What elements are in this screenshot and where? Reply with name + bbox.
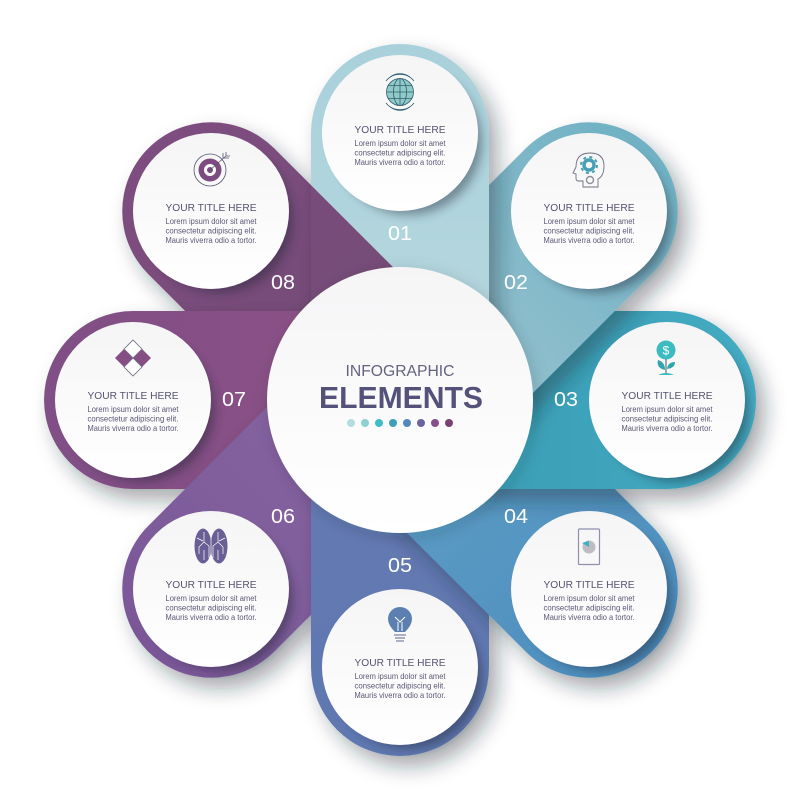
body text 01: Mauris viverra odio a tortor. (354, 158, 446, 167)
number 02: 02 (504, 272, 528, 294)
body text 04: Lorem ipsum dolor sit amet (544, 594, 635, 603)
card 06 (133, 511, 293, 671)
body text 06: Lorem ipsum dolor sit amet (166, 594, 257, 603)
icon: brain (194, 528, 228, 564)
icon: head with gears (573, 153, 604, 187)
body text 02: consectetur adipiscing elit. (544, 227, 634, 236)
icon: tablet with pie chart (578, 529, 600, 564)
petal 04 (337, 337, 715, 715)
icon: puzzle pieces (115, 340, 151, 376)
petal 01 (311, 44, 489, 400)
body text 01: Lorem ipsum dolor sit amet (354, 139, 446, 148)
title 03: YOUR TITLE HERE (622, 390, 712, 402)
card 07 (55, 322, 215, 482)
body text 08: Lorem ipsum dolor sit amet (166, 217, 257, 226)
body text 03: Mauris viverra odio a tortor. (622, 424, 712, 433)
body text 02: Mauris viverra odio a tortor. (544, 236, 634, 245)
icon: target with arrow (194, 152, 230, 186)
card 02 (511, 133, 671, 293)
icon: globe (386, 74, 414, 110)
body text 07: Mauris viverra odio a tortor. (88, 424, 178, 433)
petal 02 (337, 85, 715, 463)
icon: money plant: $ (663, 344, 670, 358)
number 06: 06 (271, 506, 295, 528)
title 01: YOUR TITLE HERE (354, 124, 446, 136)
body text 02: Lorem ipsum dolor sit amet (544, 217, 635, 226)
body text 03: consectetur adipiscing elit. (622, 415, 712, 424)
body text 06: Mauris viverra odio a tortor. (166, 613, 256, 622)
body text 03: Lorem ipsum dolor sit amet (622, 405, 713, 414)
heading: infographic: INFOGRAPHIC (346, 363, 454, 380)
card 01 (322, 55, 482, 215)
body text 01: consectetur adipiscing elit. (354, 149, 446, 158)
number 05: 05 (388, 555, 412, 577)
center panel (267, 267, 533, 533)
heading: elements: ELEMENTS (319, 380, 483, 415)
petal 06 (85, 337, 463, 715)
body text 04: consectetur adipiscing elit. (544, 604, 634, 613)
body text 05: Mauris viverra odio a tortor. (354, 691, 446, 700)
number 08: 08 (271, 272, 295, 294)
title 08: YOUR TITLE HERE (166, 202, 256, 214)
body text 06: consectetur adipiscing elit. (166, 604, 256, 613)
icon: money plant (656, 340, 676, 375)
title 02: YOUR TITLE HERE (544, 202, 634, 214)
icon: light bulb (388, 607, 412, 641)
petal 07 (44, 311, 400, 489)
body text 08: consectetur adipiscing elit. (166, 227, 256, 236)
title 05: YOUR TITLE HERE (354, 657, 446, 669)
body text 05: consectetur adipiscing elit. (354, 682, 446, 691)
card 05 (322, 589, 482, 749)
petal 05 (311, 400, 489, 756)
number 03: 03 (554, 389, 578, 411)
body text 07: Lorem ipsum dolor sit amet (88, 405, 179, 414)
number 04: 04 (504, 506, 528, 528)
body text 07: consectetur adipiscing elit. (88, 415, 178, 424)
card 08 (133, 133, 293, 293)
petal 03 (400, 311, 756, 489)
title 04: YOUR TITLE HERE (544, 579, 634, 591)
body text 04: Mauris viverra odio a tortor. (544, 613, 634, 622)
card 03 (589, 322, 749, 482)
dots row (347, 419, 453, 427)
number 07: 07 (222, 389, 246, 411)
card 04 (511, 511, 671, 671)
petal 08 overlap over petal 01 (311, 185, 394, 302)
title 06: YOUR TITLE HERE (166, 579, 256, 591)
title 07: YOUR TITLE HERE (88, 390, 178, 402)
body text 08: Mauris viverra odio a tortor. (166, 236, 256, 245)
number 01: 01 (388, 223, 412, 245)
petal 08 (85, 85, 463, 463)
body text 05: Lorem ipsum dolor sit amet (354, 672, 446, 681)
